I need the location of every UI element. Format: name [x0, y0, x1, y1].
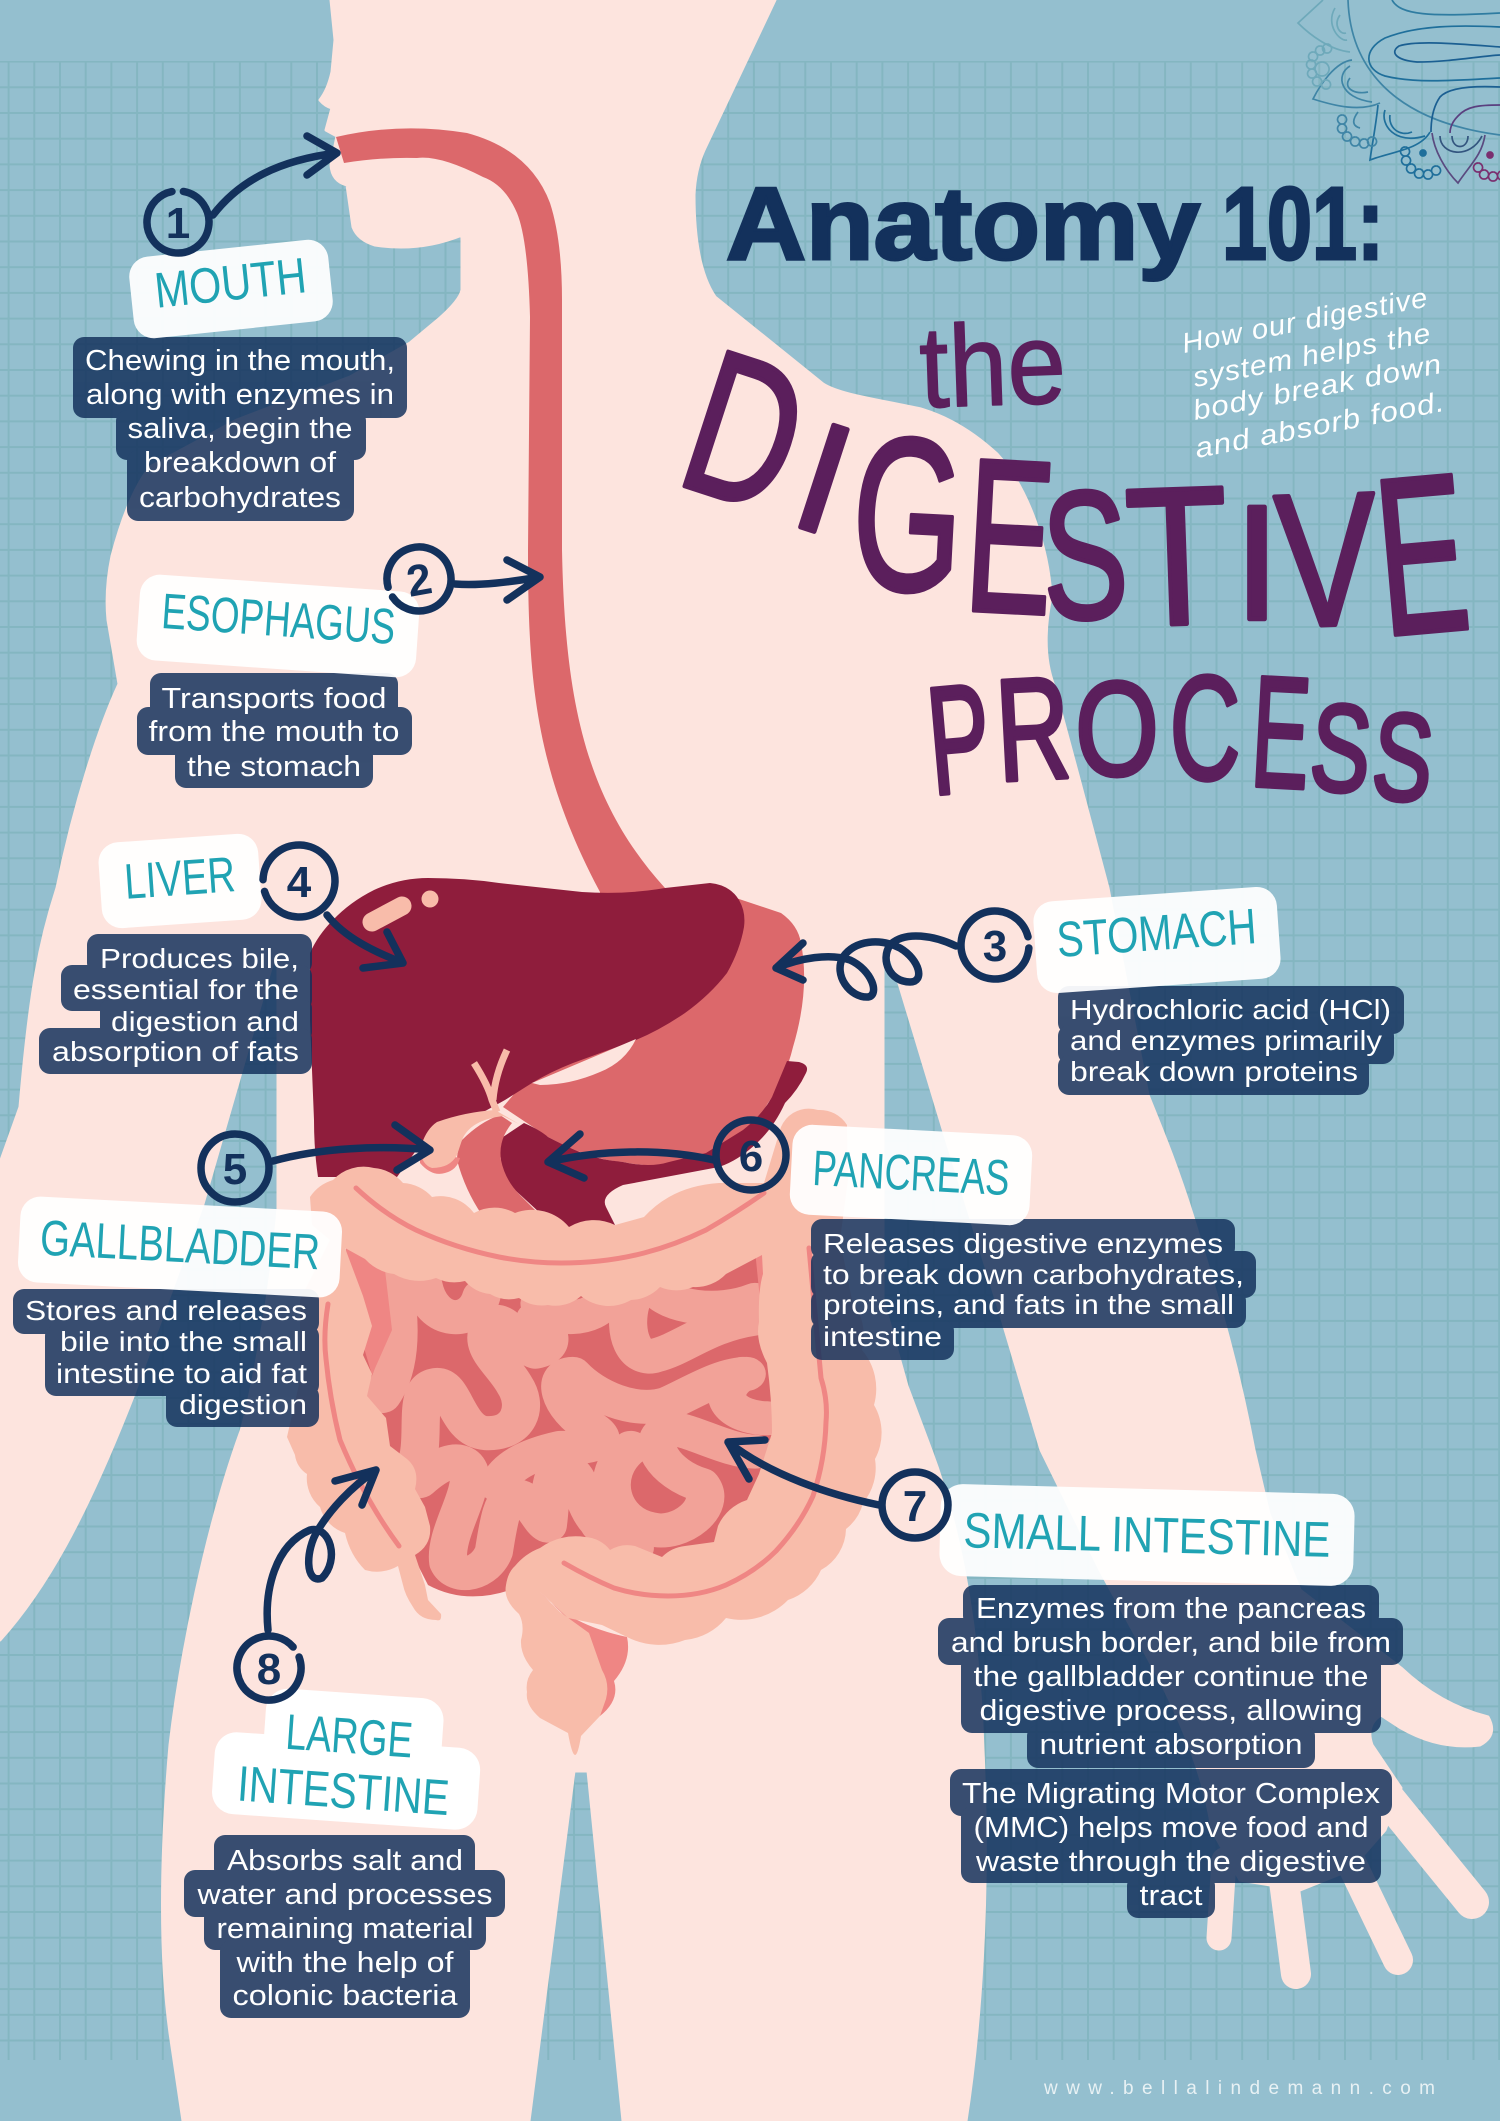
label: mouth — [127, 238, 335, 340]
text block: large intestine: Absorbs salt and — [227, 1845, 463, 1877]
heading: DIGESTIVE: D — [659, 305, 832, 557]
text block: pancreas: Releases digestive enzymes — [823, 1228, 1223, 1259]
text block: small intestine: the gallbladder continue the — [974, 1661, 1368, 1693]
label: small intestine: SMALL INTESTINE — [963, 1502, 1331, 1568]
text block: small intestine — [938, 1585, 1403, 1918]
heading: PROCESS: P — [921, 651, 997, 827]
text block: large intestine: with the help of — [235, 1947, 455, 1979]
text block: pancreas: to break down carbohydrates, — [823, 1259, 1244, 1290]
intestinal loops — [382, 1285, 768, 1573]
text block: small intestine: (MMC) helps move food and — [974, 1812, 1368, 1844]
text block: small intestine: digestive process, allowing — [980, 1695, 1362, 1727]
text block: stomach — [1058, 986, 1404, 1095]
text block: gallbladder: bile into the small — [60, 1326, 307, 1357]
heading: DIGESTIVE: V — [1272, 453, 1380, 668]
text block: pancreas — [811, 1219, 1256, 1360]
finger 3 — [1345, 1850, 1398, 1960]
marker 6 — [716, 1120, 786, 1190]
text block: stomach: Hydrochloric acid (HCl) — [1070, 994, 1391, 1025]
label: large intestine: INTESTINE — [236, 1755, 451, 1826]
arrow 5: gallbladder — [273, 1125, 430, 1170]
text block: gallbladder — [13, 1289, 319, 1427]
text block: large intestine: water and processes — [196, 1879, 492, 1911]
text block: pancreas: intestine — [823, 1321, 942, 1352]
text block: esophagus: the stomach — [187, 751, 361, 783]
arrow 4: liver — [327, 915, 403, 968]
marker 1: 1 — [166, 199, 190, 248]
label: esophagus: ESOPHAGUS — [160, 583, 397, 655]
label: liver — [97, 833, 263, 929]
duodenum — [457, 1115, 545, 1220]
text block: esophagus: Transports food — [162, 683, 386, 715]
text block: small intestine: Enzymes from the pancreas — [976, 1593, 1366, 1625]
text block: liver — [39, 934, 312, 1074]
text block: large intestine: remaining material — [216, 1913, 474, 1945]
text block: gallbladder: intestine to aid fat — [56, 1358, 307, 1389]
text block: esophagus: from the mouth to — [148, 716, 400, 748]
subtitle: How our digestive — [1179, 282, 1431, 359]
text block: large intestine — [184, 1835, 505, 2018]
title — [726, 166, 1384, 281]
subtitle — [1179, 282, 1448, 464]
text block: small intestine: nutrient absorption — [1040, 1729, 1302, 1761]
arrow 2: esophagus — [455, 560, 540, 600]
arrow 7: small intestine — [728, 1440, 879, 1505]
marker 7: 7 — [903, 1482, 927, 1531]
website url: www.bellalindemann.com — [1043, 2078, 1435, 2099]
finger 4 — [1385, 1795, 1472, 1902]
text block: large intestine: colonic bacteria — [232, 1980, 458, 2012]
text block: mouth — [73, 337, 407, 521]
subtitle: and absorb food. — [1192, 386, 1448, 464]
heading: DIGESTIVE: E — [960, 413, 1060, 661]
finger 2 — [1280, 1850, 1296, 1974]
marker 7 — [882, 1472, 948, 1538]
label: stomach — [1032, 886, 1282, 994]
label: large intestine: LARGE — [284, 1704, 415, 1768]
esophagus — [336, 128, 700, 930]
heading: PROCESS: O — [1075, 654, 1159, 804]
colon line: descending — [564, 1248, 826, 1596]
text block: liver: digestion and — [111, 1006, 299, 1037]
large intestine — [287, 1109, 882, 1755]
arrow 1: mouth — [213, 136, 337, 215]
arrow 8: large intestine — [267, 1470, 376, 1630]
text block: gallbladder: digestion — [179, 1389, 307, 1420]
heading: DIGESTIVE: I — [776, 390, 871, 568]
marker 1 — [142, 186, 214, 258]
label: gallbladder: GALLBLADDER — [39, 1210, 321, 1280]
gallbladder — [420, 1050, 519, 1174]
label: large intestine — [211, 1684, 485, 1831]
finger 1 — [1219, 1860, 1224, 1938]
heading: PROCESS — [921, 644, 1439, 829]
text block: small intestine: tract — [1140, 1880, 1202, 1912]
marker 4: 4 — [287, 858, 312, 907]
arrow 3: stomach — [776, 936, 956, 997]
marker 8 — [228, 1627, 310, 1709]
marker 8: 8 — [257, 1645, 281, 1694]
label: stomach: STOMACH — [1055, 898, 1258, 968]
label: mouth: MOUTH — [152, 247, 309, 319]
heading: DIGESTIVE: T — [1122, 444, 1232, 668]
marker 3 — [958, 908, 1032, 982]
heading: DIGESTIVE: E — [1367, 427, 1478, 684]
heading: PROCESS: C — [1170, 644, 1240, 811]
label: pancreas — [789, 1124, 1033, 1226]
pancreas — [500, 1061, 807, 1228]
heading: DIGESTIVE — [659, 305, 1478, 684]
heading: the: the — [917, 298, 1068, 433]
text block: gallbladder: Stores and releases — [25, 1295, 307, 1326]
text block: liver: essential for the — [73, 974, 299, 1005]
title: 101: — [1222, 166, 1384, 281]
title: Anatomy — [726, 166, 1200, 281]
heading: PROCESS: S — [1367, 685, 1439, 829]
marker 6: 6 — [739, 1132, 763, 1181]
marker 2 — [380, 540, 458, 618]
text block: mouth: carbohydrates — [139, 482, 341, 514]
label: liver: LIVER — [122, 846, 237, 910]
heading: PROCESS: R — [992, 646, 1074, 812]
marker 5 — [201, 1134, 269, 1202]
colon line: ascending — [325, 1304, 399, 1546]
text block: mouth: along with enzymes in — [86, 379, 394, 411]
text block: liver: Produces bile, — [100, 943, 299, 974]
heading: PROCESS: S — [1305, 676, 1377, 820]
text block: small intestine: and brush border, and bile from — [951, 1627, 1391, 1659]
heading: DIGESTIVE: G — [847, 390, 969, 639]
arrow 6: pancreas — [548, 1134, 714, 1178]
text block: small intestine: The Migrating Motor Complex — [962, 1778, 1381, 1810]
stomach gap — [532, 1039, 636, 1085]
colon line: transverse — [356, 1188, 764, 1263]
liver highlight — [372, 906, 402, 922]
text block: stomach: and enzymes primarily — [1070, 1025, 1382, 1056]
liver — [310, 878, 744, 1177]
label: esophagus — [135, 573, 421, 679]
subtitle: system helps the — [1190, 317, 1434, 393]
text block: mouth: saliva, begin the — [128, 413, 352, 445]
subtitle: body break down — [1190, 348, 1445, 426]
text block: mouth: breakdown of — [144, 447, 337, 479]
text block: small intestine: waste through the digestive — [975, 1846, 1366, 1878]
marker 5: 5 — [223, 1145, 247, 1194]
heading: PROCESS: E — [1247, 644, 1315, 823]
label: small intestine — [939, 1484, 1355, 1586]
small intestine — [350, 1240, 785, 1596]
mandala ornament — [1298, 0, 1500, 183]
label: pancreas: PANCREAS — [811, 1140, 1011, 1206]
text block: pancreas: proteins, and fats in the small — [823, 1289, 1234, 1320]
text block: liver: absorption of fats — [52, 1036, 299, 1067]
stomach — [503, 896, 804, 1166]
marker 3: 3 — [983, 922, 1007, 971]
marker 4 — [262, 844, 336, 918]
heading: DIGESTIVE: I — [1234, 471, 1280, 654]
bile duct — [474, 1050, 507, 1112]
heading: DIGESTIVE: S — [1039, 453, 1131, 659]
marker 2: 2 — [403, 554, 436, 607]
text block: esophagus — [137, 673, 412, 788]
text block: mouth: Chewing in the mouth, — [85, 345, 395, 377]
label: gallbladder — [17, 1196, 343, 1298]
liver highlight dot — [422, 890, 438, 908]
text block: stomach: break down proteins — [1070, 1056, 1358, 1087]
